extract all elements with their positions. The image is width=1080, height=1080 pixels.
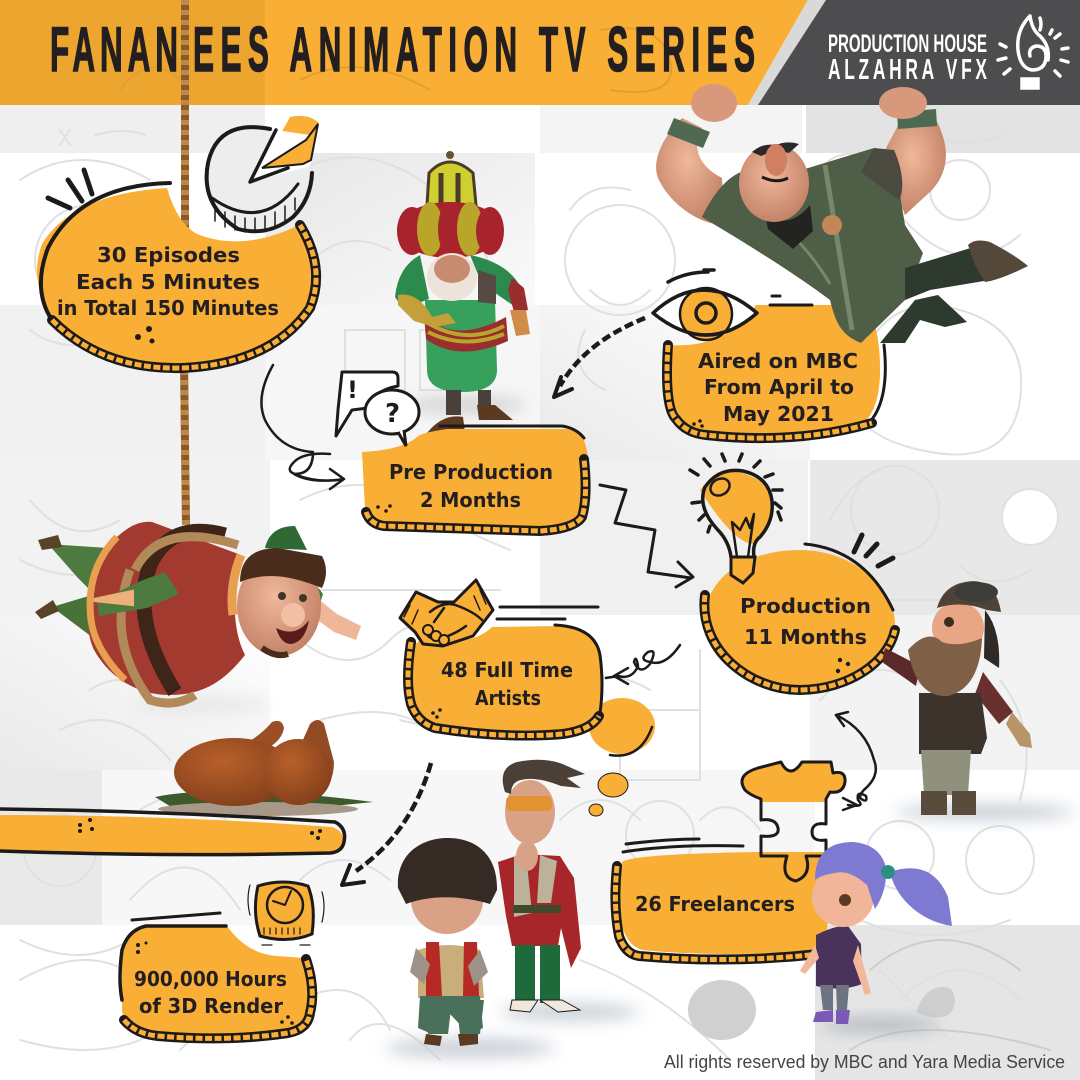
text: aired on MBC: Aired on MBC bbox=[698, 349, 858, 373]
text: artists: 48 Full Time bbox=[441, 658, 573, 682]
arrow: dashed to render bbox=[342, 763, 431, 885]
text: production bbox=[740, 594, 871, 649]
text: episodes: in Total 150 Minutes bbox=[57, 296, 279, 320]
thought bubbles bbox=[589, 773, 628, 816]
character: bearded aviator bbox=[882, 581, 1075, 819]
character: girl with purple hair bbox=[800, 842, 952, 1031]
text: pre production bbox=[389, 460, 553, 512]
icon: eye bbox=[653, 270, 757, 340]
icon: clock bbox=[248, 882, 324, 945]
text: pre production: Pre Production bbox=[389, 460, 553, 484]
rope bbox=[184, 0, 186, 525]
text: production: Production bbox=[740, 594, 871, 618]
arrow: zigzag to production bbox=[600, 485, 693, 587]
turban bbox=[397, 202, 504, 258]
icon: speech bubbles bbox=[336, 372, 419, 446]
text: render: 900,000 Hours bbox=[134, 967, 287, 991]
panel: shelf bar bbox=[0, 809, 345, 855]
arrow: dashed eye to pre production bbox=[554, 318, 645, 397]
text: artists bbox=[441, 658, 573, 710]
arrow: curly to artists bbox=[606, 645, 680, 684]
icon: light bulb bbox=[690, 454, 782, 583]
icon: speech bubbles: ? bbox=[385, 399, 400, 429]
panel: freelancers bubble bbox=[615, 839, 830, 960]
text: aired on MBC bbox=[698, 349, 858, 426]
character: flying man on rope bbox=[35, 522, 361, 713]
text: episodes bbox=[57, 243, 279, 320]
panel: episodes bubble bbox=[37, 170, 316, 368]
panel: render bubble bbox=[120, 913, 312, 1039]
character: turbaned old man bbox=[395, 151, 530, 433]
text: pre production: 2 Months bbox=[420, 488, 521, 512]
production house credit bbox=[828, 16, 1068, 88]
title: FANAN bbox=[50, 14, 178, 85]
footer: copyright: All rights reserved by MBC and Yara Media Service bbox=[664, 1052, 1065, 1072]
title: EES ANIMATION TV SERIES bbox=[193, 14, 755, 85]
character: tall boy in red bbox=[498, 760, 640, 1020]
text: freelancers: 26 Freelancers bbox=[635, 892, 795, 916]
text: render bbox=[134, 967, 287, 1018]
header banner bbox=[0, 0, 1080, 105]
panel: aired bubble bbox=[667, 296, 885, 438]
character: boy with fringe bbox=[385, 838, 555, 1057]
icon: speech bubbles: ! bbox=[347, 376, 358, 404]
icon: flame logo bbox=[998, 16, 1068, 88]
text: production: 11 Months bbox=[744, 625, 867, 649]
production house credit: ALZAHRA VFX bbox=[828, 54, 987, 86]
text: render: of 3D Render bbox=[139, 994, 283, 1018]
text: episodes: 30 Episodes bbox=[97, 243, 240, 267]
text: aired on MBC: From April to bbox=[704, 375, 854, 399]
icon: handshake bbox=[400, 580, 493, 646]
arrow: curly double-headed to freelancers bbox=[836, 712, 876, 810]
text: episodes: Each 5 Minutes bbox=[76, 270, 260, 294]
arrow: curly to pre production bbox=[261, 365, 344, 489]
character: roast chicken on plate bbox=[155, 720, 373, 816]
character: strong man bbox=[656, 84, 1028, 343]
text: artists: Artists bbox=[475, 686, 541, 710]
panel: production bubble bbox=[704, 535, 895, 690]
icon: pie chart bbox=[206, 116, 319, 232]
panel: artists bubble bbox=[408, 607, 655, 756]
panel: pre production bubble bbox=[362, 426, 589, 531]
icon: puzzle piece bbox=[742, 762, 845, 881]
text: aired on MBC: May 2021 bbox=[723, 402, 834, 426]
